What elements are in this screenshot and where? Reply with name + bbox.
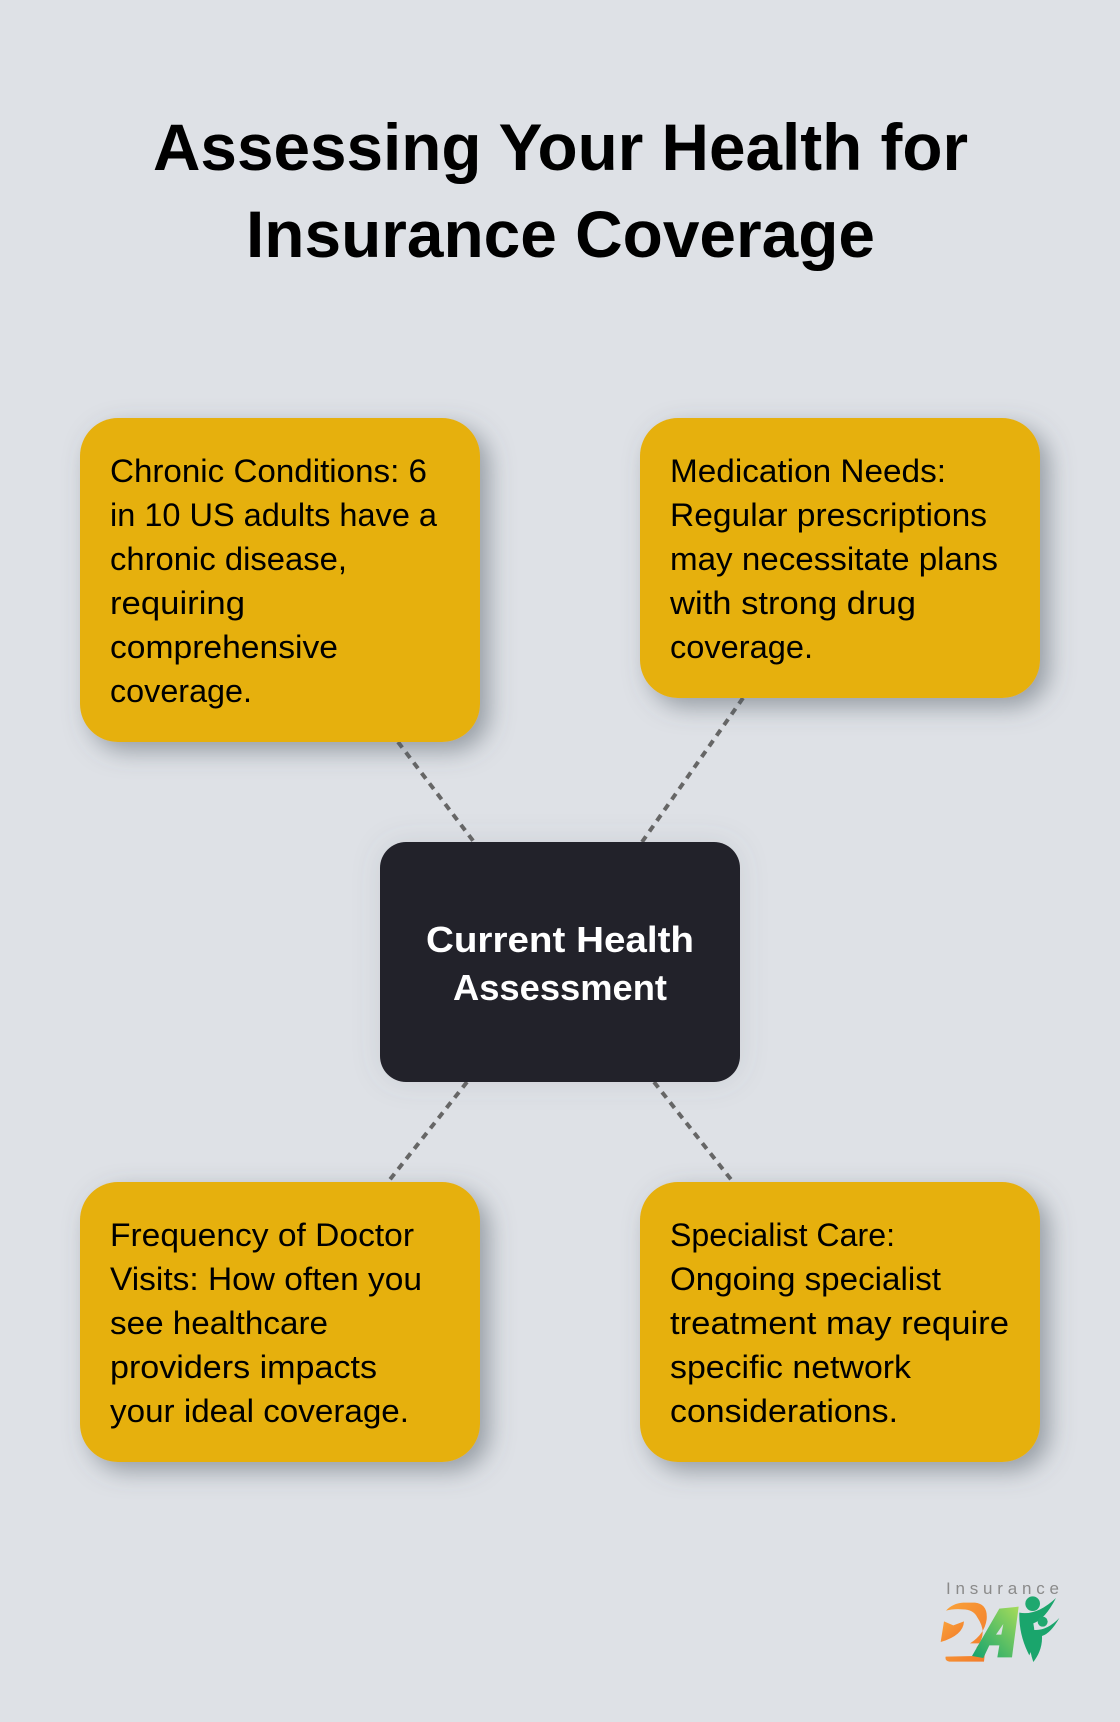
center node: current health assessment: Assessment [453, 967, 667, 1008]
card: frequency of doctor visits: Visits: How often you [110, 1261, 422, 1297]
card: chronic conditions [80, 418, 480, 742]
card: specialist care: considerations. [670, 1393, 898, 1429]
card: specialist care: Specialist Care: [670, 1217, 895, 1253]
card: chronic conditions: Chronic Conditions: 6 [110, 453, 427, 489]
card: medication needs [640, 418, 1040, 698]
card: medication needs: Regular prescriptions [670, 497, 987, 533]
card: frequency of doctor visits: see healthcare [110, 1305, 328, 1341]
connector: chronic conditions to center [398, 742, 474, 842]
card: frequency of doctor visits: providers impacts [110, 1349, 377, 1385]
card: frequency of doctor visits: Frequency of Doctor [110, 1217, 414, 1253]
center node: current health assessment: Current Health [426, 919, 694, 960]
card: specialist care: Ongoing specialist [670, 1261, 941, 1297]
card: medication needs: coverage. [670, 629, 813, 665]
card: frequency of doctor visits: your ideal coverage. [110, 1393, 409, 1429]
card: chronic conditions: coverage. [110, 673, 252, 709]
title: Insurance Coverage [246, 197, 875, 271]
logo: Insurance 2A [941, 1579, 1059, 1662]
card: chronic conditions: comprehensive [110, 629, 338, 665]
card: specialist care: treatment may require [670, 1305, 1009, 1341]
title: Assessing Your Health for [153, 110, 968, 184]
card: chronic conditions: in 10 US adults have a [110, 497, 437, 533]
card: medication needs: Medication Needs: [670, 453, 946, 489]
logo: Insurance 2A: Insurance [946, 1579, 1059, 1598]
card: specialist care [640, 1182, 1040, 1462]
connector: doctor visits to center [388, 1082, 467, 1182]
card: frequency of doctor visits [80, 1182, 480, 1462]
card: medication needs: with strong drug [669, 585, 916, 621]
card: chronic conditions: chronic disease, [110, 541, 347, 577]
card: medication needs: may necessitate plans [670, 541, 998, 577]
connector: specialist care to center [654, 1082, 733, 1182]
connector: medication needs to center [642, 698, 743, 842]
center node: current health assessment [380, 842, 740, 1082]
title [153, 110, 968, 271]
card: chronic conditions: requiring [110, 585, 245, 621]
card: specialist care: specific network [670, 1349, 912, 1385]
